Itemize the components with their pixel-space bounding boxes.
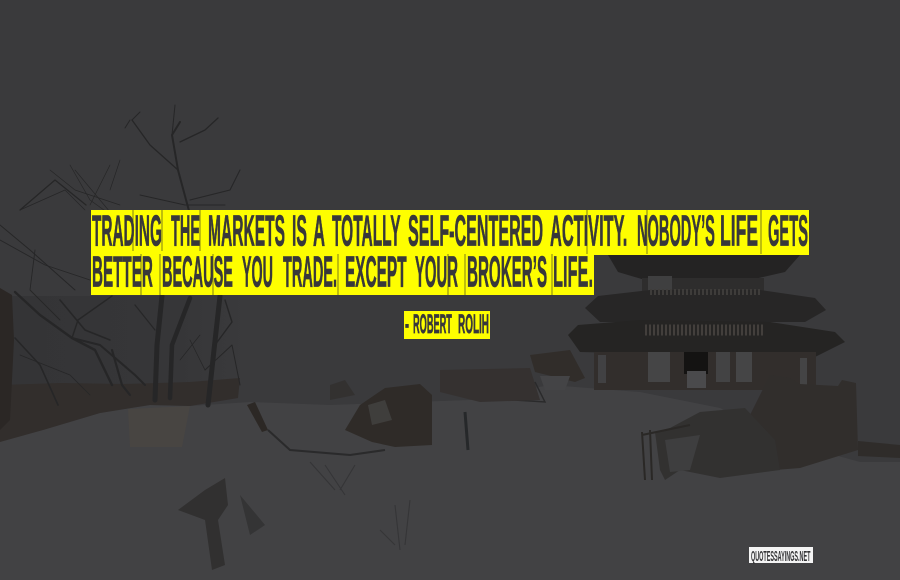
pagoda middle roof <box>585 290 826 322</box>
background: pagoda <box>568 255 845 390</box>
attribution: ROBERT <box>413 310 452 340</box>
quote line 2: TRADE. <box>283 246 337 296</box>
background: brown brush at tree line <box>0 378 240 442</box>
quote line 1: THE <box>171 205 200 255</box>
background: fence and rocks below pagoda <box>655 408 780 480</box>
quote line 2: YOU <box>242 246 273 296</box>
background: rocks in snow <box>178 478 228 570</box>
attribution: ROLIH <box>458 310 489 340</box>
pagoda lower roof <box>568 320 845 357</box>
quote line 1 <box>92 205 808 256</box>
quote highlight: line 1 <box>91 210 809 255</box>
quote highlight: line 2 <box>91 254 594 295</box>
quote line 2: EXCEPT <box>345 246 407 296</box>
quote line 2: YOUR <box>415 246 458 296</box>
background: bare trees on the left <box>0 105 240 405</box>
quote line 1: NOBODY’S <box>637 205 715 255</box>
pagoda upper walls <box>642 278 764 298</box>
pagoda ground floor <box>594 352 816 390</box>
attribution: - <box>405 310 409 339</box>
pagoda top roof <box>608 255 800 280</box>
attribution highlight <box>404 311 490 339</box>
quote line 1: A <box>313 207 325 256</box>
background: dry brush on snow <box>310 462 410 550</box>
quote line 1: ACTIVITY. <box>550 207 627 256</box>
quote line 1: IS <box>292 207 307 256</box>
background: low wall on the far right <box>858 441 900 458</box>
quote line 2: BROKER’S <box>467 246 547 296</box>
quote line 2: BECAUSE <box>162 246 233 296</box>
watermark: QUOTESSAYINGS.NET <box>751 549 811 565</box>
quote line 2: LIFE. <box>553 248 593 297</box>
quote line 1: LIFE <box>720 207 758 256</box>
background: dark tree trunk at left edge <box>0 288 14 430</box>
background: rock outcrop on hill <box>345 384 432 447</box>
background: snowy hillside <box>0 385 900 580</box>
background: stone wall <box>745 375 858 470</box>
attribution <box>405 310 489 340</box>
quote line 1: SELF-CENTERED <box>408 207 543 256</box>
background: shaded thicket behind the trees <box>0 296 250 395</box>
quote line 1: TOTALLY <box>332 205 401 255</box>
quote line 1: TRADING <box>92 205 162 255</box>
background: boulder on left of pagoda <box>530 350 585 382</box>
pagoda door <box>684 352 708 374</box>
background: pale dry grass patch <box>128 406 190 447</box>
background: fence at foot of rocks <box>480 382 545 402</box>
quote line 1: GETS <box>768 205 808 255</box>
quote line 2 <box>92 246 593 297</box>
quote line 1: MARKETS <box>208 206 285 255</box>
quote line 2: BETTER <box>92 246 153 296</box>
background: brown rock band <box>440 368 540 402</box>
